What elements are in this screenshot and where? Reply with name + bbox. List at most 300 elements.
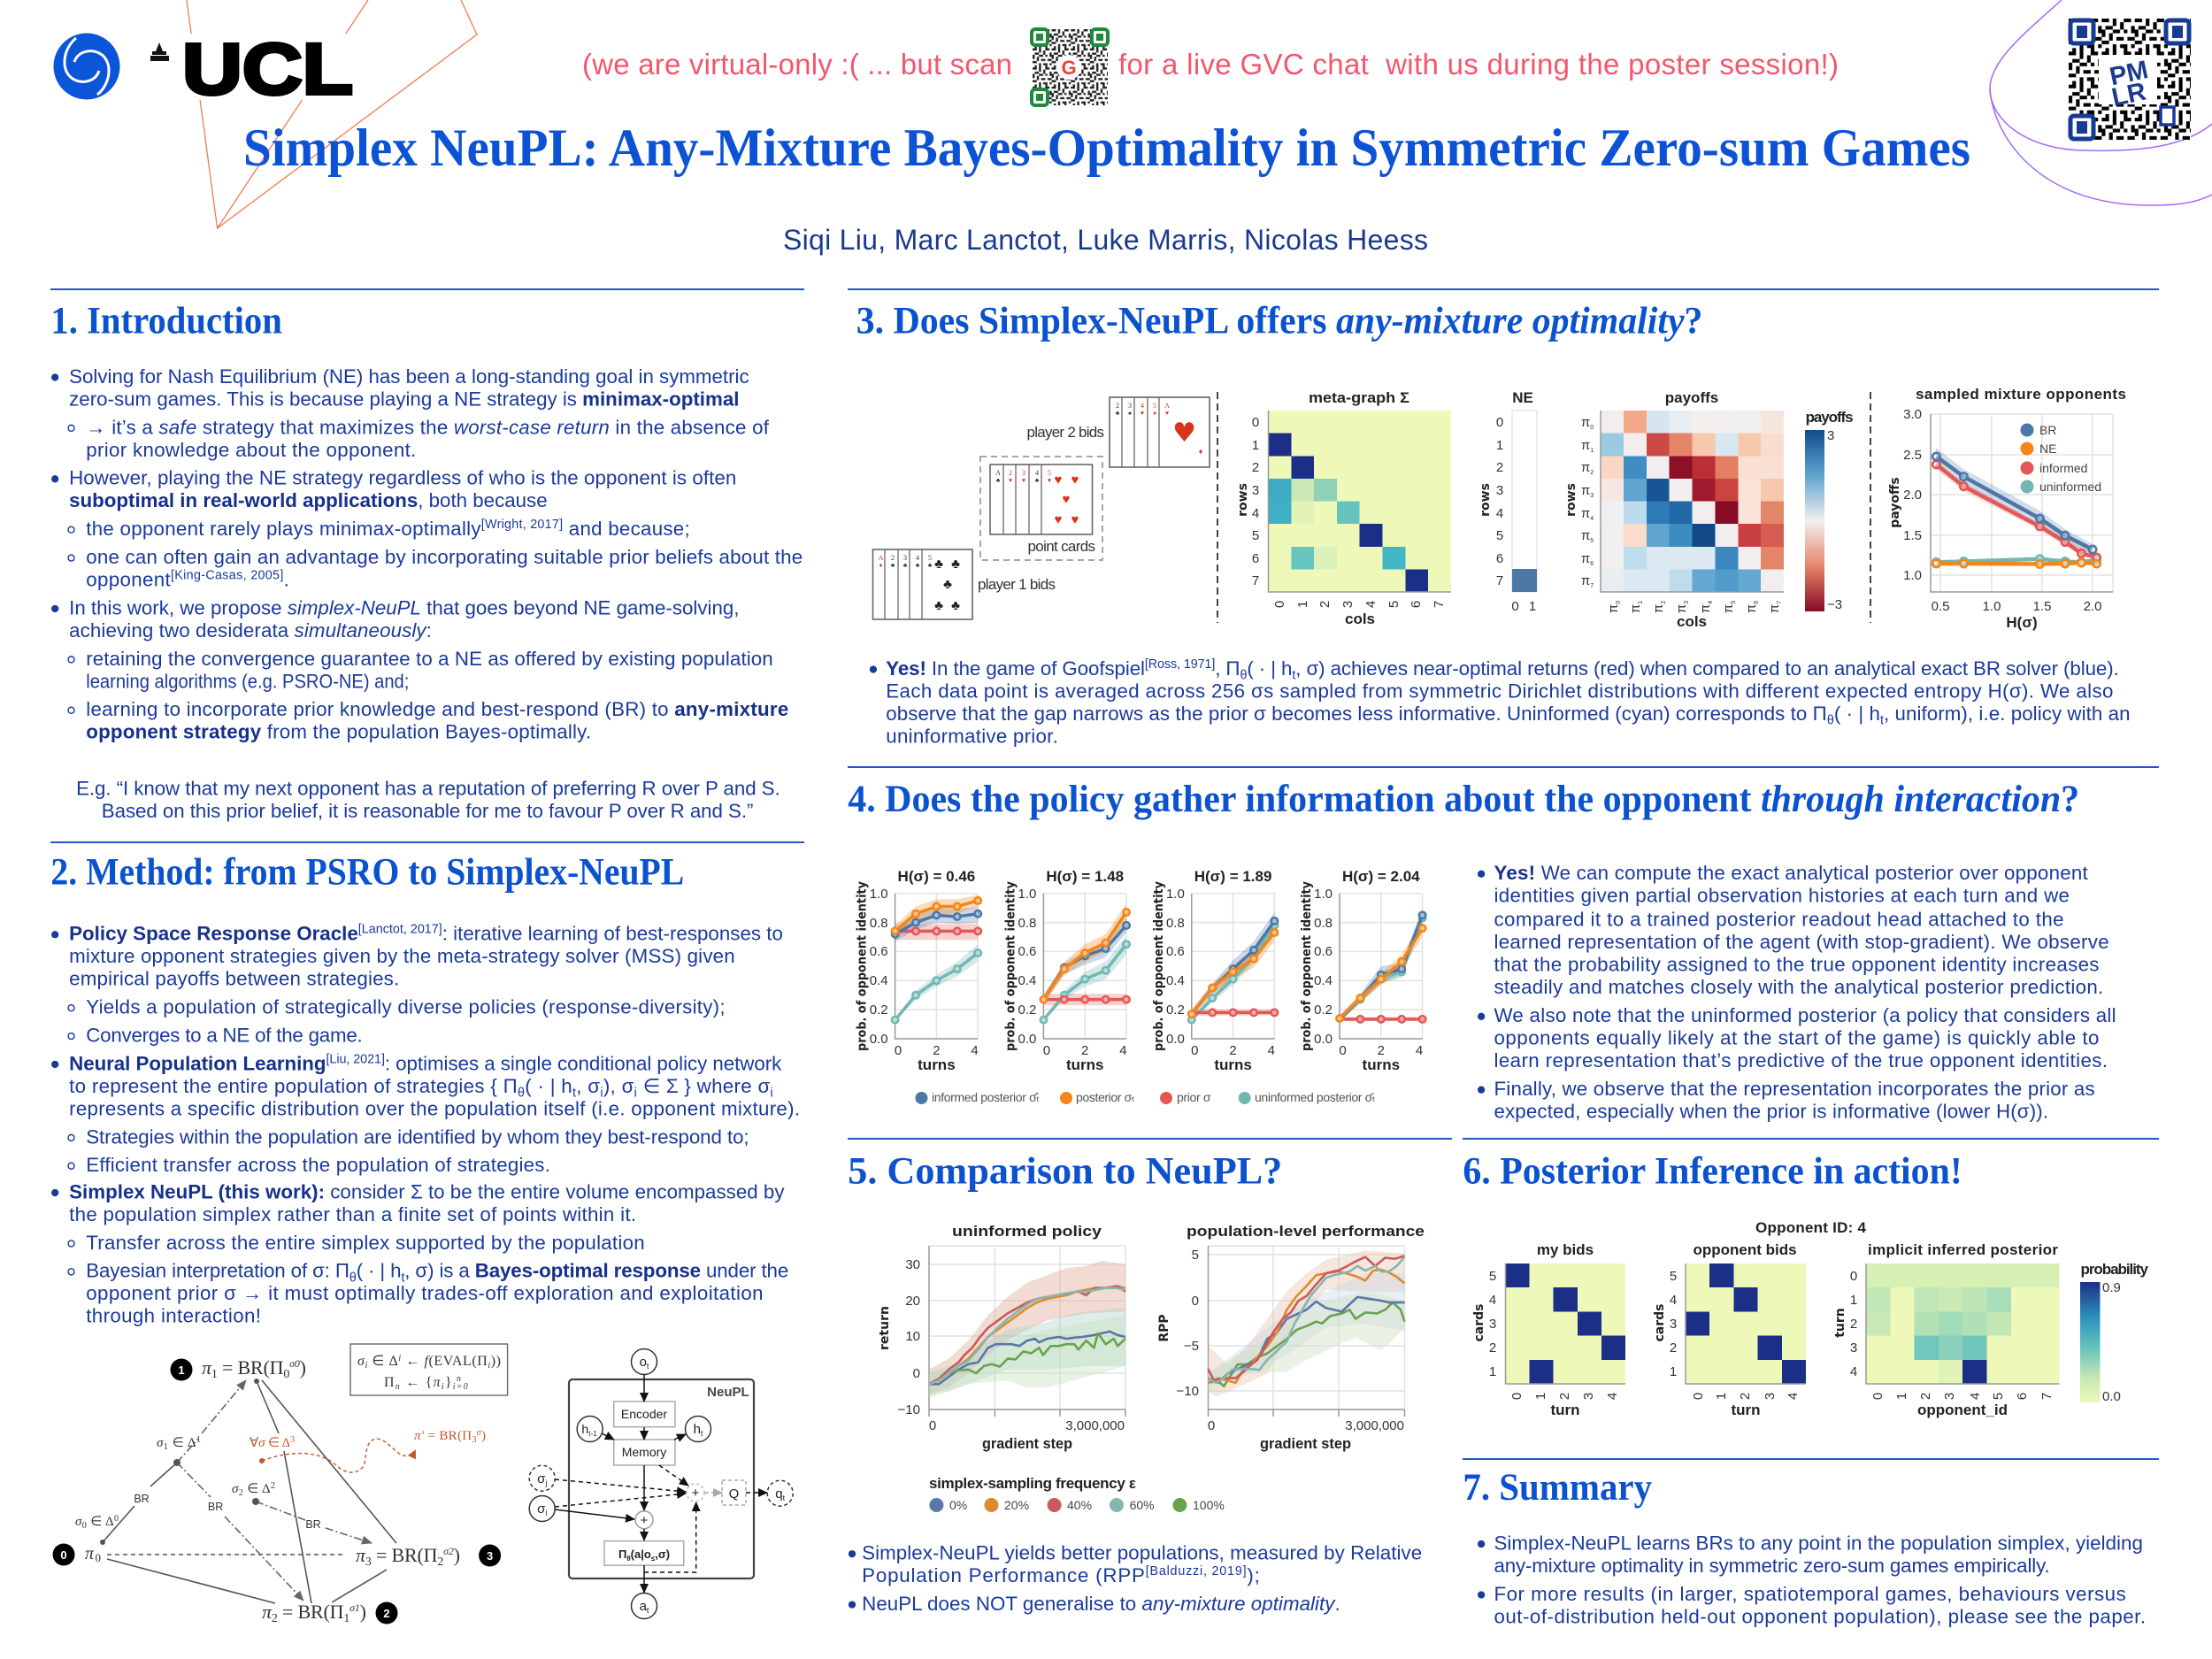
- text block: method bullets: ( · | h: [357, 1260, 402, 1282]
- numbered badges: 0: [60, 1548, 67, 1562]
- text block: section 4 findings: opponents equally likely at the start of the game) is quickly able to: [1494, 1027, 2099, 1049]
- axis titles: [1236, 483, 1375, 627]
- chart: payoffs heatmap: [1564, 389, 1854, 630]
- player 1 cards: ♣: [916, 563, 920, 569]
- tick labels: 1.0: [1166, 887, 1185, 902]
- row labels: 3: [1252, 483, 1259, 498]
- orange any-mixture best response: σ: [477, 1428, 482, 1438]
- text block: introduction bullets: learning algorithms (e.g. PSRO-NE) and;: [86, 670, 409, 692]
- bullets: introduction: [51, 373, 74, 713]
- row labels: 1: [1529, 599, 1536, 614]
- tick labels: [1850, 1269, 2055, 1400]
- column labels: 5: [1731, 601, 1737, 604]
- axis titles: turns: [1066, 1056, 1103, 1073]
- title: my bids: [1537, 1241, 1594, 1258]
- axis titles: prob. of opponent identity: [856, 881, 870, 1051]
- chart: H(sigma)=0.46: [856, 868, 979, 1073]
- equation labels: [75, 1356, 460, 1625]
- equation labels: 1: [164, 1442, 168, 1452]
- encoder and memory: [604, 1402, 746, 1565]
- tick labels: [1903, 407, 2101, 614]
- text block: introduction bullets: Solving for Nash Equilibrium (NE) has been a long-standing goal in symmetric: [69, 365, 749, 388]
- tick labels: 5: [1991, 1393, 2006, 1400]
- equation labels: 2: [271, 1481, 275, 1491]
- orange any-mixture best response: ): [481, 1429, 486, 1443]
- tick labels: [870, 887, 979, 1058]
- text block: method bullets: i: [771, 1087, 773, 1101]
- equation labels: = BR(Π: [278, 1601, 344, 1623]
- tick labels: −5: [1184, 1339, 1199, 1354]
- axis titles: turn: [1833, 1308, 1847, 1338]
- text block: method bullets: represents a specific distribution over the population itself (i.e. opponent mixture).: [69, 1097, 800, 1119]
- tick labels: 3,000,000: [1065, 1418, 1125, 1433]
- equation labels: π: [262, 1601, 273, 1623]
- text block: section 5 findings: );: [1247, 1564, 1260, 1586]
- equation box: [350, 1344, 508, 1395]
- text block: method bullets: [Lanctot, 2017]: [358, 923, 442, 937]
- box labels: ,σ): [655, 1548, 670, 1561]
- text block: method bullets: ( · | h: [525, 1075, 572, 1097]
- axis titles: turns: [1214, 1056, 1252, 1073]
- text block: method bullets: θ: [349, 1271, 357, 1286]
- simplex dots: [100, 1379, 259, 1545]
- text block: section 3 findings: , σ) achieves near-optimal returns (red) when compared to an analytical exact BR solver (blue).: [1295, 657, 2119, 680]
- tick labels: −10: [1177, 1384, 1199, 1399]
- tick labels: 0.0: [1018, 1032, 1036, 1047]
- point cards: ♣: [996, 478, 1001, 484]
- tick labels: 4: [1489, 1293, 1496, 1308]
- column labels: 2: [1317, 601, 1333, 608]
- row labels: 6: [1590, 561, 1594, 567]
- tick labels: 0.4: [870, 973, 888, 988]
- axis titles: RPP: [1157, 1314, 1171, 1342]
- tick labels: 1: [1894, 1393, 1909, 1400]
- tick labels: 5: [1192, 1248, 1199, 1263]
- player 1 cards: 2: [891, 554, 895, 562]
- text block: introduction bullets: and because;: [563, 518, 690, 540]
- text block: summary: [1494, 1532, 2146, 1627]
- tick labels: 1.0: [1983, 599, 2001, 614]
- title: uninformed policy: [952, 1223, 1102, 1240]
- tick labels: 3: [1581, 1393, 1596, 1400]
- note: virtual-only right: for a live GVC chat with us during the poster session!): [1118, 48, 1839, 81]
- tick labels: 4: [1119, 1043, 1127, 1058]
- axes: [1601, 411, 1784, 592]
- node labels: t: [647, 1606, 649, 1615]
- heading: 7: 7. Summary: [1463, 1467, 1652, 1509]
- equation labels: σ: [232, 1482, 239, 1496]
- text block: method bullets: [Liu, 2021]: [326, 1052, 385, 1066]
- axis titles: H(σ): [2006, 614, 2038, 631]
- node labels: h: [581, 1422, 588, 1436]
- box labels: Encoder: [621, 1407, 667, 1421]
- equation labels: 1: [211, 1368, 218, 1381]
- tick labels: 0.0: [1314, 1032, 1333, 1047]
- row labels: 0: [1252, 415, 1259, 430]
- equation box: }: [445, 1375, 452, 1390]
- text block: method bullets: ∈ Σ } where σ: [637, 1075, 770, 1097]
- diagram: population simplex: [53, 1344, 508, 1625]
- row labels: [1581, 415, 1594, 589]
- equation labels: 2: [272, 1612, 278, 1625]
- tick labels: 0: [1509, 1393, 1525, 1400]
- equation box: i=0: [453, 1382, 468, 1392]
- text block: section 3 findings: [886, 657, 2131, 747]
- row labels: 3: [1590, 493, 1594, 499]
- equation labels: π: [202, 1356, 212, 1379]
- text block: method bullets: the population simplex rather than a finite set of points within it.: [69, 1203, 636, 1225]
- text block: introduction bullets: opponent strategy from the population Bayes-optimally.: [86, 721, 591, 743]
- column labels: 4: [1363, 601, 1379, 608]
- column labels: π: [1651, 604, 1666, 613]
- axes: [1686, 1263, 1806, 1384]
- node labels: t: [647, 1362, 649, 1371]
- heading: 5: 5. Comparison to NeuPL?: [848, 1151, 1282, 1193]
- equation labels: 0: [283, 1368, 289, 1381]
- text block: section 3 findings: ( · | h: [1247, 657, 1292, 680]
- text block: method bullets: Policy Space Response Oracle: [69, 923, 358, 945]
- equation box: ∈ Δ: [368, 1354, 398, 1369]
- column labels: 6: [1409, 601, 1424, 608]
- panel title: H(σ) = 2.04: [1342, 868, 1420, 885]
- axis titles: prob. of opponent identity: [1003, 881, 1018, 1051]
- NeuPL box: [569, 1379, 754, 1578]
- title: NE: [1512, 389, 1533, 406]
- row labels: 0: [1511, 599, 1519, 614]
- tick labels: 6: [2015, 1393, 2030, 1400]
- text block: method bullets: Bayes-optimal response under the: [475, 1260, 788, 1282]
- grid and axes: [1043, 894, 1126, 1039]
- tick labels: 3: [1942, 1393, 1957, 1400]
- tick labels: 0.8: [1314, 916, 1333, 931]
- player 1 cards: A: [879, 554, 884, 562]
- orange any-mixture best response: 3: [472, 1435, 476, 1445]
- player 1 cards: ♣: [891, 563, 895, 569]
- player 1 cards: ♣: [951, 598, 960, 613]
- point cards: 2: [1009, 469, 1012, 477]
- player 2 cards: 2: [1116, 402, 1119, 410]
- point cards: 4: [1035, 469, 1039, 477]
- node labels: σ: [537, 1502, 545, 1517]
- text block: section 3 findings: , Π: [1215, 657, 1240, 680]
- row labels: 7: [1590, 583, 1594, 589]
- text block: method bullets: Efficient transfer across the population of strategies.: [86, 1154, 550, 1176]
- cells: [1866, 1263, 2059, 1384]
- NeuPL box: NeuPL: [707, 1385, 749, 1400]
- bullets: summary: [1478, 1540, 1485, 1599]
- equation box: n: [396, 1382, 400, 1392]
- legend: payoffs colour scale: payoffs: [1806, 409, 1854, 426]
- tick labels: 0: [929, 1418, 936, 1433]
- panel: 4 information gathering: [848, 779, 2116, 1123]
- title: sampled mixture opponents: [1916, 386, 2126, 403]
- tick labels: 1: [1533, 1393, 1548, 1400]
- chart: H(sigma)=1.89: [1152, 868, 1275, 1073]
- tick labels: 1: [1489, 1364, 1496, 1379]
- legend: simplex-sampling frequency: 100%: [1193, 1498, 1225, 1512]
- axes: [1866, 1263, 2060, 1384]
- heading: 1. Introduction: 1. Introduction: [50, 300, 282, 342]
- axis titles: [1300, 881, 1400, 1073]
- QR code: live chat: [1032, 29, 1108, 105]
- row labels: 7: [1252, 573, 1259, 588]
- row labels: 2: [1496, 460, 1503, 475]
- axis titles: cards: [1472, 1303, 1486, 1342]
- row labels: 1: [1252, 438, 1259, 453]
- legend: posterior series: [915, 1090, 1376, 1104]
- tick labels: 5: [1489, 1269, 1496, 1284]
- axis titles: gradient step: [982, 1435, 1072, 1452]
- tick labels: 0: [1191, 1043, 1198, 1058]
- bullets: section 4: [1478, 871, 1485, 1094]
- legend: payoffs colour scale: [1805, 409, 1854, 612]
- box labels: [618, 1407, 739, 1563]
- tick labels: 0.6: [1166, 944, 1185, 959]
- axis titles: rows: [1564, 483, 1578, 517]
- tick labels: 5: [1670, 1269, 1677, 1284]
- numbered badges: [53, 1359, 501, 1624]
- axis titles: prob. of opponent identity: [1152, 881, 1166, 1051]
- QR code: PMLR: LR: [2109, 78, 2148, 112]
- tick labels: 2: [933, 1043, 941, 1058]
- node labels: j: [544, 1479, 547, 1487]
- tick labels: [1166, 887, 1275, 1058]
- column labels: 5: [1386, 601, 1402, 608]
- axis titles: [1653, 1303, 1761, 1418]
- text block: example quote: Based on this prior belief, it is reasonable for me to favour P over R and S.”: [102, 800, 753, 822]
- text block: method bullets: t: [401, 1271, 404, 1286]
- heading: 6: 6. Posterior Inference in action!: [1463, 1151, 1962, 1193]
- player 1 cards: ♣: [934, 598, 943, 613]
- tick labels: 4: [1605, 1393, 1620, 1400]
- heading: 2. Method: 2. Method: from PSRO to Simplex-NeuPL: [50, 852, 684, 894]
- column labels: 3: [1340, 601, 1356, 608]
- column labels: π: [1674, 604, 1689, 613]
- node labels: o: [640, 1355, 647, 1370]
- tick labels: [898, 1257, 1125, 1433]
- text block: section 4 findings: compared it to a trained posterior readout head attached to the: [1494, 909, 2064, 931]
- bullet 3: [870, 665, 877, 673]
- text block: method bullets: Bayesian interpretation of σ: Π: [86, 1260, 349, 1282]
- text block: summary: For more results (in larger, spatiotemporal games, behaviours versus: [1494, 1583, 2126, 1605]
- row labels: 4: [1252, 506, 1259, 521]
- tick labels: 0: [1870, 1393, 1886, 1400]
- text block: section 5 findings: [862, 1542, 1422, 1615]
- tick labels: 20: [905, 1294, 920, 1309]
- equation labels: 2: [239, 1488, 243, 1498]
- player 2 cards: ♣: [1116, 411, 1120, 417]
- tick labels: 3: [1489, 1317, 1496, 1332]
- equation labels: σ1: [349, 1601, 360, 1614]
- axis titles: turn: [1550, 1402, 1580, 1418]
- legend: BR: [2039, 423, 2056, 437]
- tick labels: 1.0: [870, 887, 888, 902]
- text block: method bullets: through interaction!: [86, 1305, 261, 1327]
- column labels: π: [1628, 604, 1643, 613]
- equation labels: 0: [82, 1521, 87, 1531]
- text block: method bullets: Neural Population Learning: [69, 1052, 326, 1074]
- text block: section 3 findings: θ: [1240, 669, 1247, 683]
- legend: posterior series: uninformed posterior σ̄ₜ: [1255, 1090, 1376, 1104]
- tick labels: 1: [1670, 1364, 1677, 1379]
- row labels: π: [1581, 460, 1590, 475]
- tick labels: 0: [1850, 1269, 1857, 1284]
- tick labels: 4: [1416, 1043, 1423, 1058]
- point cards: ♥: [1022, 478, 1025, 484]
- text block: section 3 findings: ( · | h: [1834, 703, 1880, 725]
- tick labels: 0.2: [870, 1002, 888, 1018]
- row labels: π: [1581, 415, 1590, 430]
- column labels: 3: [1684, 601, 1690, 604]
- player 2 cards: 3: [1128, 402, 1132, 410]
- grid and axes: [895, 894, 978, 1039]
- tick labels: 2: [1489, 1340, 1496, 1356]
- point cards: ♥: [1048, 478, 1051, 484]
- panel: 2 method: [50, 852, 800, 1327]
- column labels: π: [1744, 604, 1759, 613]
- column labels: 6: [1754, 601, 1760, 604]
- point cards: ♥: [1055, 472, 1063, 488]
- title: implicit inferred posterior: [1868, 1241, 2058, 1258]
- tick labels: 2.5: [1903, 448, 1922, 463]
- tick labels: 7: [2039, 1393, 2055, 1400]
- column labels: π: [1721, 604, 1736, 613]
- equation box: Π: [384, 1375, 395, 1390]
- heading: 3: 3. Does Simplex-NeuPL offers any-mixture optimality?: [856, 300, 1702, 342]
- text block: introduction bullets: achieving two desiderata simultaneously:: [69, 619, 432, 641]
- section rules: [50, 289, 2159, 1459]
- tick labels: 0.5: [1932, 599, 1949, 614]
- axis titles: opponent_id: [1917, 1402, 2008, 1418]
- equation labels: 0: [114, 1514, 119, 1524]
- divider dashes: [1217, 392, 1870, 623]
- chart: sampled mixture opponents: [1888, 386, 2126, 631]
- legend: uninformed: [2039, 480, 2101, 494]
- bullets: section 5: [849, 1550, 856, 1609]
- row labels: 1: [1590, 448, 1594, 454]
- equation box: i: [488, 1361, 490, 1371]
- box labels: ≤: [651, 1555, 656, 1563]
- legend: probability scale: 0.0: [2102, 1389, 2121, 1404]
- player 2 cards: ♥: [1165, 411, 1169, 417]
- equation box: i: [365, 1361, 367, 1371]
- text block: section 4 findings: Yes! We can compute the exact analytical posterior over opponent: [1494, 862, 2088, 884]
- text block: introduction bullets: suboptimal in real-world applications, both because: [69, 489, 548, 511]
- grid and axes: [1209, 1246, 1405, 1417]
- node labels: h: [694, 1422, 701, 1437]
- tick labels: 1.0: [1018, 887, 1036, 902]
- tick labels: 30: [905, 1257, 920, 1272]
- bands: [1936, 448, 2097, 561]
- numbered badges: 3: [487, 1549, 493, 1563]
- point cards: ♥: [1063, 492, 1071, 507]
- series: [1340, 908, 1423, 1021]
- panel: 7 summary: [1463, 1467, 2146, 1627]
- tick labels: 2: [1850, 1317, 1857, 1332]
- node labels: σ: [537, 1471, 545, 1486]
- orange any-mixture best response: 3: [290, 1435, 295, 1445]
- tick labels: 2: [1378, 1043, 1385, 1058]
- text block: section 4 findings: learn representation that’s predictive of the true opponent identities.: [1494, 1049, 2108, 1071]
- text block: section 4 findings: Finally, we observe that the representation incorporates the prior as: [1494, 1078, 2095, 1100]
- node labels: a: [640, 1599, 647, 1614]
- legend: posterior series: prior σ: [1177, 1090, 1211, 1104]
- title: population-level performance: [1187, 1223, 1425, 1240]
- tick labels: 0.6: [870, 944, 888, 959]
- axis titles: turns: [918, 1056, 956, 1073]
- text block: section 4 findings: expected, especially when the prior is informative (lower H(σ)).: [1494, 1101, 2048, 1123]
- tick labels: [1670, 1269, 1801, 1400]
- panel title: H(σ) = 0.46: [898, 868, 975, 885]
- tick labels: 2.0: [2084, 599, 2101, 614]
- bullets: method: [51, 931, 74, 1275]
- chart: population-level performance: [1157, 1223, 1425, 1452]
- text block: method bullets: i: [634, 1087, 637, 1101]
- text block: method bullets: , σ) is a: [404, 1260, 475, 1282]
- column labels: 0: [1272, 601, 1287, 608]
- tick labels: 0: [1043, 1043, 1050, 1058]
- row labels: 4: [1496, 506, 1503, 521]
- axis titles: return: [878, 1306, 892, 1350]
- tick labels: 3,000,000: [1345, 1418, 1404, 1433]
- row labels: 4: [1590, 516, 1594, 522]
- equation box: f(EVAL(Π: [424, 1354, 488, 1369]
- row labels: π: [1581, 551, 1590, 566]
- text block: method bullets: Strategies within the population are identified by whom they best-respond to;: [86, 1125, 749, 1148]
- axis titles: [1157, 1314, 1351, 1452]
- orange any-mixture best response: [250, 1428, 486, 1472]
- equation box: π: [434, 1375, 442, 1390]
- text block: section 4 findings: identities given partial observation histories at each turn and we: [1494, 885, 2070, 907]
- tick labels: 2.0: [1903, 488, 1922, 503]
- point cards: ♣: [1035, 478, 1040, 484]
- legend: posterior series: informed posterior σ̂ₜ: [932, 1090, 1041, 1104]
- point cards: [980, 457, 1102, 560]
- text block: section 3 findings: , uniform), i.e. policy with an: [1884, 703, 2131, 725]
- equation labels: ∈ Δ: [87, 1515, 114, 1529]
- axes: [1506, 1263, 1625, 1384]
- axis titles: [1472, 1303, 1580, 1418]
- text block: section 5 findings: [Balduzzi, 2019]: [1146, 1564, 1247, 1578]
- text block: section 3 findings: uninformative prior.: [886, 725, 1058, 747]
- equation labels: = BR(Π: [218, 1356, 284, 1379]
- tick labels: 0: [1691, 1393, 1706, 1400]
- legend: informed: [2039, 461, 2087, 475]
- tick labels: 3.0: [1903, 407, 1922, 422]
- numbered badges: 2: [383, 1607, 390, 1620]
- text block: section 5 findings: NeuPL does NOT generalise to any-mixture optimality.: [862, 1593, 1340, 1615]
- bar: [1512, 411, 1537, 592]
- BR labels: BR: [305, 1518, 321, 1531]
- equation labels: π: [356, 1544, 366, 1566]
- row labels: π: [1581, 573, 1590, 588]
- tick labels: 2: [1918, 1393, 1933, 1400]
- row labels: 5: [1590, 538, 1594, 544]
- point cards: A: [995, 469, 1001, 477]
- row labels: π: [1581, 506, 1590, 521]
- equation labels: σ: [75, 1515, 82, 1529]
- player 1 cards: 4: [916, 554, 919, 562]
- row labels: 1: [1496, 438, 1503, 453]
- chart: opponent bids: [1653, 1241, 1806, 1418]
- equation labels: σ2: [443, 1545, 454, 1557]
- label: point cards: point cards: [1028, 538, 1095, 555]
- tick labels: 0: [1192, 1294, 1199, 1309]
- BR labels: BR: [134, 1493, 150, 1505]
- player 1 cards: ♣: [903, 563, 908, 569]
- tick labels: [1018, 887, 1127, 1058]
- point cards: ♥: [1071, 472, 1079, 488]
